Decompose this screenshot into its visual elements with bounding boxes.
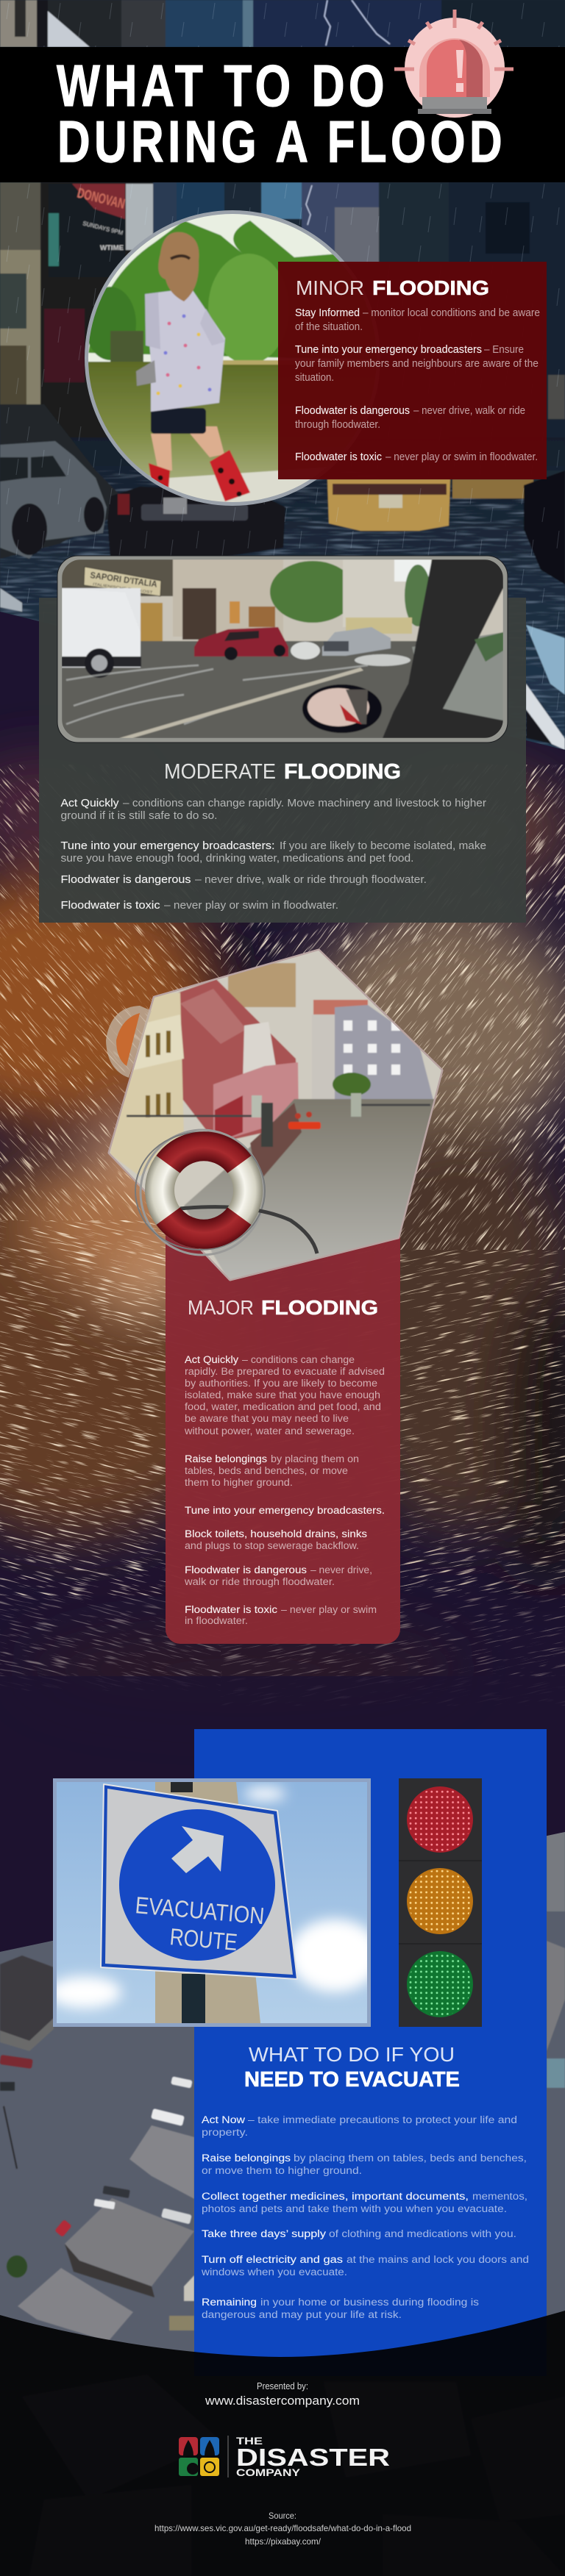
icon: red alarm siren bbox=[394, 10, 514, 118]
text: floodwater is toxic: – never play or swim in floodwater. bbox=[385, 451, 538, 463]
text: raise belongings bbox=[185, 1453, 359, 1488]
text: tune into broadcasters: If you are likely to become isolated, make bbox=[280, 840, 486, 852]
text: three days supply: of clothing and medications with you. bbox=[329, 2228, 516, 2239]
text: turn off electricity: Turn off electricity and gas bbox=[202, 2254, 343, 2265]
text: floodwater is toxic bbox=[185, 1604, 377, 1626]
panel: minor flooding bbox=[278, 262, 547, 479]
logo: the disaster company bbox=[179, 2436, 390, 2478]
heading: minor flooding: MINOR bbox=[296, 276, 364, 299]
text: three days supply: Take three days’ supply bbox=[202, 2228, 326, 2239]
text: act quickly: be aware that you may need to live bbox=[185, 1413, 349, 1424]
text: tune into broadcasters bbox=[60, 840, 486, 865]
text: raise belongings bbox=[202, 2153, 527, 2176]
text: floodwater is toxic: Floodwater is toxic bbox=[60, 899, 160, 912]
text: tune into broadcasters: Tune into your emergency broadcasters bbox=[295, 343, 482, 356]
text: floodwater is dangerous bbox=[60, 873, 427, 886]
text: act now: – take immediate precautions to protect your life and bbox=[248, 2114, 517, 2125]
text: turn off electricity bbox=[201, 2254, 529, 2278]
title bbox=[57, 53, 506, 174]
text: act quickly: by authorities. If you are likely to become bbox=[185, 1378, 377, 1389]
background: flooded city street in the rain: SUNDAYS 9PM bbox=[82, 220, 124, 237]
logo: the disaster company: COMPANY bbox=[236, 2467, 300, 2478]
text: tune into broadcasters bbox=[295, 343, 539, 384]
text: collect together: Collect together medicines, important documents, bbox=[202, 2191, 469, 2202]
text: floodwater is dangerous: Floodwater is dangerous bbox=[295, 404, 410, 417]
text: block toilets: Block toilets, household drains, sinks bbox=[185, 1528, 367, 1539]
text: source links: https://www.ses.vic.gov.au/get-ready/floodsafe/what-do-do-in-a-flood bbox=[154, 2523, 411, 2533]
text: floodwater is dangerous: – never drive, bbox=[310, 1564, 372, 1575]
logo: the disaster company: DISASTER bbox=[236, 2444, 390, 2471]
text: presented by: Presented by: bbox=[257, 2380, 308, 2391]
title: WHAT TO DO bbox=[57, 53, 388, 118]
text: presented by: www.disastercompany.com bbox=[205, 2394, 360, 2408]
text: raise belongings: Raise belongings bbox=[185, 1453, 267, 1464]
text: source links: https://pixabay.com/ bbox=[245, 2536, 321, 2547]
heading: minor flooding: FLOODING bbox=[372, 276, 489, 299]
text: source links: Source: bbox=[269, 2511, 296, 2521]
text: floodwater is dangerous: Floodwater is dangerous bbox=[60, 873, 191, 886]
photo: girl in rain boots by flooded park bbox=[85, 210, 344, 506]
text: raise belongings: by placing them on bbox=[271, 1453, 359, 1464]
icon: life ring with rope bbox=[106, 1006, 317, 1255]
text: presented by bbox=[205, 2380, 360, 2408]
text: collect together: photos and pets and take them with you when you evacuate. bbox=[202, 2203, 507, 2214]
text: raise belongings: by placing them on tables, beds and benches, bbox=[294, 2153, 527, 2164]
text: remaining bbox=[202, 2297, 479, 2320]
text: tune into broadcasters: Tune into your emergency broadcasters. bbox=[185, 1505, 385, 1516]
heading: what to do if you need to evacuate bbox=[244, 2043, 460, 2092]
text: three days supply bbox=[202, 2228, 516, 2239]
text: floodwater is dangerous: Floodwater is dangerous bbox=[185, 1564, 307, 1575]
photo: evacuation route sign: EVACUATION bbox=[134, 1892, 266, 1929]
title band bbox=[0, 47, 565, 182]
text: block toilets: and plugs to stop sewerage backflow. bbox=[185, 1540, 359, 1551]
text: tune into broadcasters: sure you have enough food, drinking water, medications and pet food. bbox=[60, 852, 413, 865]
text: act now: property. bbox=[202, 2127, 248, 2138]
text: tune into broadcasters: Tune into your emergency broadcasters: bbox=[60, 840, 275, 852]
text: remaining: Remaining bbox=[202, 2297, 257, 2308]
background: flooded city street in the rain: DONOVAN bbox=[76, 185, 127, 212]
text: stay informed: of the situation. bbox=[295, 321, 363, 333]
text: act quickly: food, water, medication and pet food, and bbox=[185, 1401, 381, 1412]
background: flooded city street in the rain: WTIME bbox=[100, 244, 124, 251]
text: floodwater is toxic: Floodwater is toxic bbox=[295, 451, 382, 463]
background: flooded suburb aerial view bbox=[0, 1832, 565, 2495]
text: floodwater is dangerous: walk or ride through floodwater. bbox=[184, 1576, 335, 1587]
text: floodwater is toxic: – never play or swim in floodwater. bbox=[164, 899, 338, 912]
heading: major flooding: MAJOR bbox=[188, 1296, 254, 1319]
text: floodwater is dangerous: – never drive, walk or ride through floodwater. bbox=[195, 873, 427, 886]
text: raise belongings: Raise belongings bbox=[202, 2153, 291, 2164]
heading: what to do if you need to evacuate: WHAT TO DO IF YOU bbox=[249, 2043, 455, 2066]
photo: evacuation route sign: ROUTE bbox=[168, 1923, 238, 1956]
text: floodwater is toxic: in floodwater. bbox=[185, 1615, 248, 1626]
text: collect together bbox=[202, 2191, 527, 2214]
text: act quickly: isolated, make sure that you have enough bbox=[185, 1389, 380, 1400]
text: floodwater is dangerous bbox=[184, 1564, 372, 1587]
text: raise belongings: them to higher ground. bbox=[185, 1477, 293, 1488]
text: act quickly: rapidly. Be prepared to evacuate if advised bbox=[185, 1366, 385, 1377]
text: floodwater is dangerous: through floodwater. bbox=[295, 418, 380, 431]
panel: moderate flooding bbox=[39, 598, 526, 923]
footer dark overlay with curved edge bbox=[0, 2311, 565, 2576]
text: tune into broadcasters: – Ensure bbox=[484, 343, 524, 356]
heading: minor flooding bbox=[296, 276, 489, 299]
text: act quickly: ground if it is still safe to do so. bbox=[60, 809, 218, 822]
heading: major flooding bbox=[188, 1296, 378, 1319]
heading: major flooding: FLOODING bbox=[261, 1296, 378, 1319]
text: act now bbox=[202, 2114, 517, 2138]
text: act now: Act Now bbox=[202, 2114, 245, 2125]
background: storm sky and sparks bbox=[0, 612, 565, 1952]
text: floodwater is toxic bbox=[60, 899, 338, 912]
heading: moderate flooding: MODERATE bbox=[164, 760, 276, 784]
photo: evacuation route sign bbox=[48, 1778, 380, 2027]
text: act quickly: Act Quickly bbox=[185, 1354, 238, 1365]
text: turn off electricity: at the mains and lock you doors and bbox=[347, 2254, 529, 2265]
text: floodwater is dangerous: – never drive, walk or ride bbox=[413, 404, 525, 417]
photo: flooded town hexagon bbox=[103, 948, 449, 1287]
text: act quickly bbox=[60, 797, 486, 822]
text: raise belongings: or move them to higher ground. bbox=[202, 2165, 362, 2176]
photo: flooded street through car window: ITALIENISCHE FEINKOST bbox=[93, 582, 153, 595]
heading: what to do if you need to evacuate: NEED TO EVACUATE bbox=[244, 2068, 460, 2092]
text: act quickly bbox=[184, 1354, 385, 1437]
text: act quickly: Act Quickly bbox=[60, 797, 119, 809]
icon: traffic light bbox=[399, 1778, 482, 2027]
panel: major flooding bbox=[166, 1220, 400, 1644]
text: collect together: mementos, bbox=[472, 2191, 527, 2202]
text: stay informed: – monitor local conditions and be aware bbox=[363, 307, 540, 319]
text: floodwater is dangerous bbox=[295, 404, 525, 431]
text: act quickly: – conditions can change bbox=[242, 1354, 355, 1365]
text: stay informed: Stay Informed bbox=[295, 307, 360, 319]
photo: flooded street through car window bbox=[57, 556, 508, 743]
text: floodwater is toxic: Floodwater is toxic bbox=[185, 1604, 277, 1615]
text: floodwater is toxic bbox=[295, 451, 538, 463]
text: remaining: in your home or business during flooding is bbox=[260, 2297, 479, 2308]
text: act quickly: without power, water and sewerage. bbox=[184, 1425, 355, 1437]
background: flooded city street in the rain bbox=[0, 0, 565, 750]
logo: the disaster company: THE bbox=[236, 2436, 263, 2447]
text: turn off electricity: windows when you evacuate. bbox=[201, 2266, 347, 2278]
text: tune into broadcasters: your family members and neighbours are aware of the bbox=[295, 357, 539, 370]
text: stay informed bbox=[295, 307, 540, 333]
text: block toilets bbox=[185, 1528, 367, 1551]
text: act quickly: – conditions can change rapidly. Move machinery and livestock to higher bbox=[123, 797, 486, 809]
photo: flooded street through car window: SAPORI D'ITALIA bbox=[90, 570, 158, 590]
heading: moderate flooding bbox=[164, 760, 401, 784]
text: tune into broadcasters: situation. bbox=[295, 371, 334, 384]
text: raise belongings: tables, beds and benches, or move bbox=[185, 1465, 348, 1476]
text: source links bbox=[154, 2511, 411, 2547]
text: remaining: dangerous and may put your life at risk. bbox=[202, 2309, 402, 2320]
heading: moderate flooding: FLOODING bbox=[284, 760, 401, 784]
text: floodwater is toxic: – never play or swim bbox=[281, 1604, 377, 1615]
panel: evacuate blue card bbox=[194, 1729, 547, 2376]
